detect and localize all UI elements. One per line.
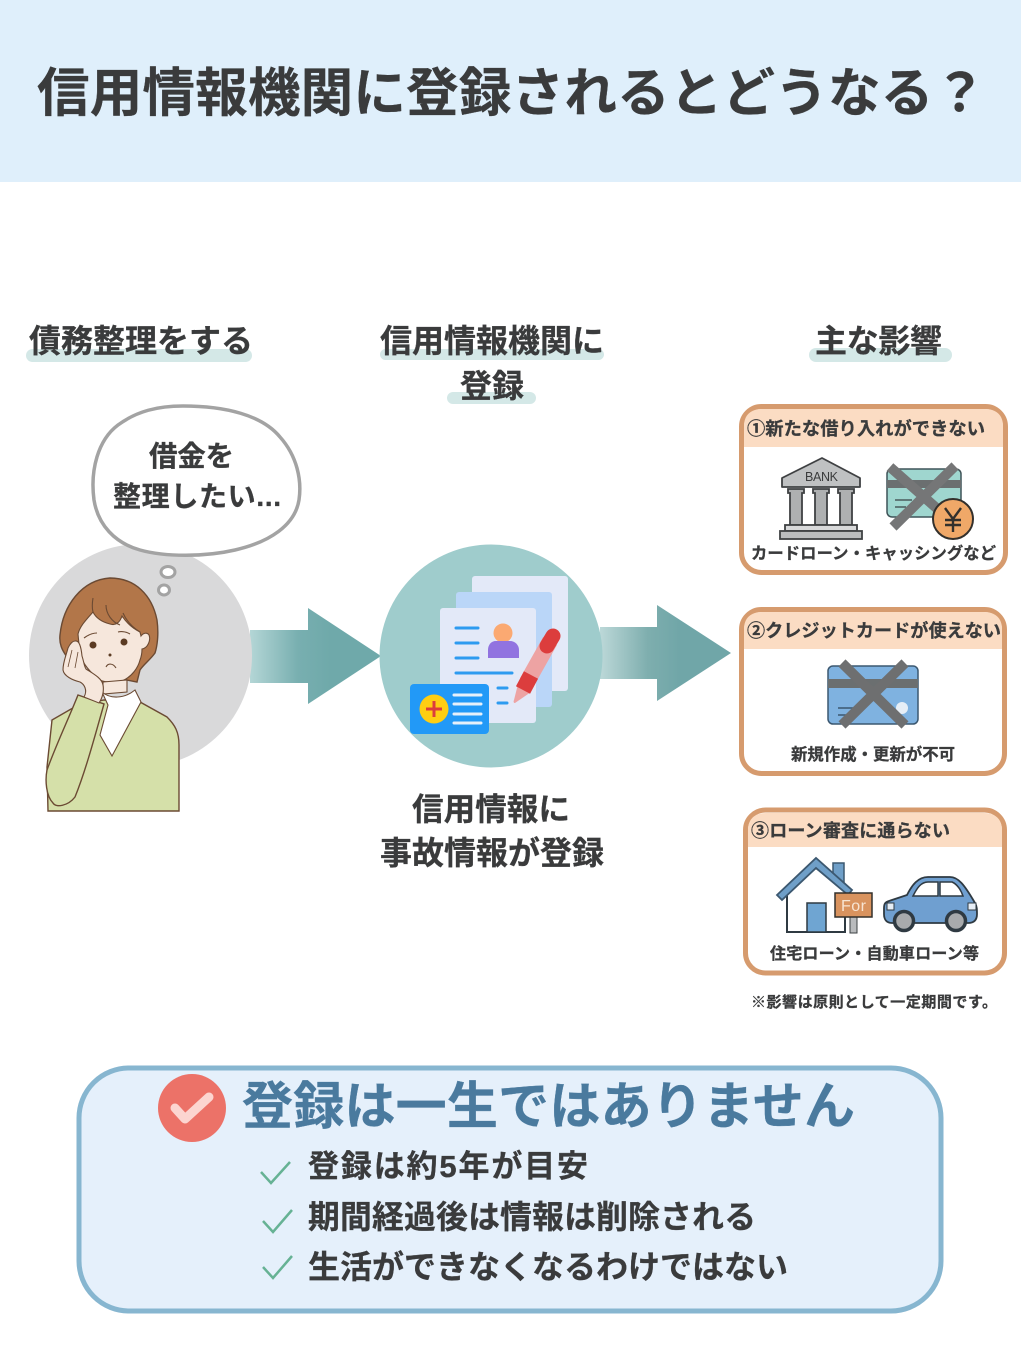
icon: crossed credit card: [828, 663, 918, 725]
caption: 信用情報に事故情報が登録: [380, 791, 604, 871]
icon: crossed card with yen coin: [887, 466, 973, 539]
title: 信用情報機関に登録されるとどうなる？: [37, 64, 986, 123]
icon: house for sale: For: [841, 898, 867, 915]
arrow: registry to effects: [600, 605, 731, 701]
bubble text: [113, 441, 281, 512]
caption: 信用情報に事故情報が登録: 信用情報に: [412, 791, 570, 827]
icon: house for sale: [777, 858, 872, 933]
icon: car: [884, 877, 977, 930]
heading: 債務整理をする: 債務整理をする: [29, 323, 253, 359]
icon: check 3: [263, 1256, 292, 1278]
effect 3 note: 住宅ローン・自動車ローン等: [770, 944, 979, 963]
effect 2 heading: ②クレジットカードが使えない: [747, 620, 1001, 641]
panel: effect 1: [742, 406, 1006, 572]
effect 1 note: カードローン・キャッシングなど: [751, 544, 997, 563]
thought bubble: [93, 406, 300, 595]
bullet 3: 生活ができなくなるわけではない: [308, 1249, 788, 1285]
footnote: ※影響は原則として一定期間です。: [751, 993, 997, 1011]
summary heading: 登録は一生ではありません: [242, 1078, 855, 1135]
icon: bank: BANK: [805, 470, 839, 484]
icon: bank: [780, 458, 862, 539]
bubble text: 借金を: [149, 441, 234, 473]
arrow: person to registry: [250, 608, 381, 704]
heading: 主な影響: 主な影響: [815, 323, 942, 359]
bubble text: 整理したい...: [113, 481, 281, 512]
icon: red check badge: [158, 1074, 226, 1142]
panel: summary: [79, 1068, 941, 1311]
illustration: credit documents: [380, 544, 602, 768]
header band: [0, 0, 1021, 182]
icon: check 2: [263, 1210, 292, 1232]
heading: 信用情報機関に登録: 信用情報機関に: [380, 323, 604, 359]
caption: 信用情報に事故情報が登録: 事故情報が登録: [380, 835, 604, 871]
bullet 1: 登録は約5年が目安: [308, 1149, 588, 1184]
panel: effect 2: [742, 610, 1004, 774]
heading: 信用情報機関に登録: [380, 323, 604, 404]
effect 3 heading: ③ローン審査に通らない: [751, 821, 950, 841]
effect 1 heading: ①新たな借り入れができない: [747, 418, 985, 439]
icon: check 1: [261, 1162, 290, 1183]
bullet 2: 期間経過後は情報は削除される: [308, 1199, 756, 1235]
heading: 信用情報機関に登録: 登録: [460, 368, 524, 404]
effect 2 note: 新規作成・更新が不可: [791, 745, 955, 764]
panel: effect 3: [746, 810, 1004, 973]
illustration: worried person: [29, 544, 252, 811]
